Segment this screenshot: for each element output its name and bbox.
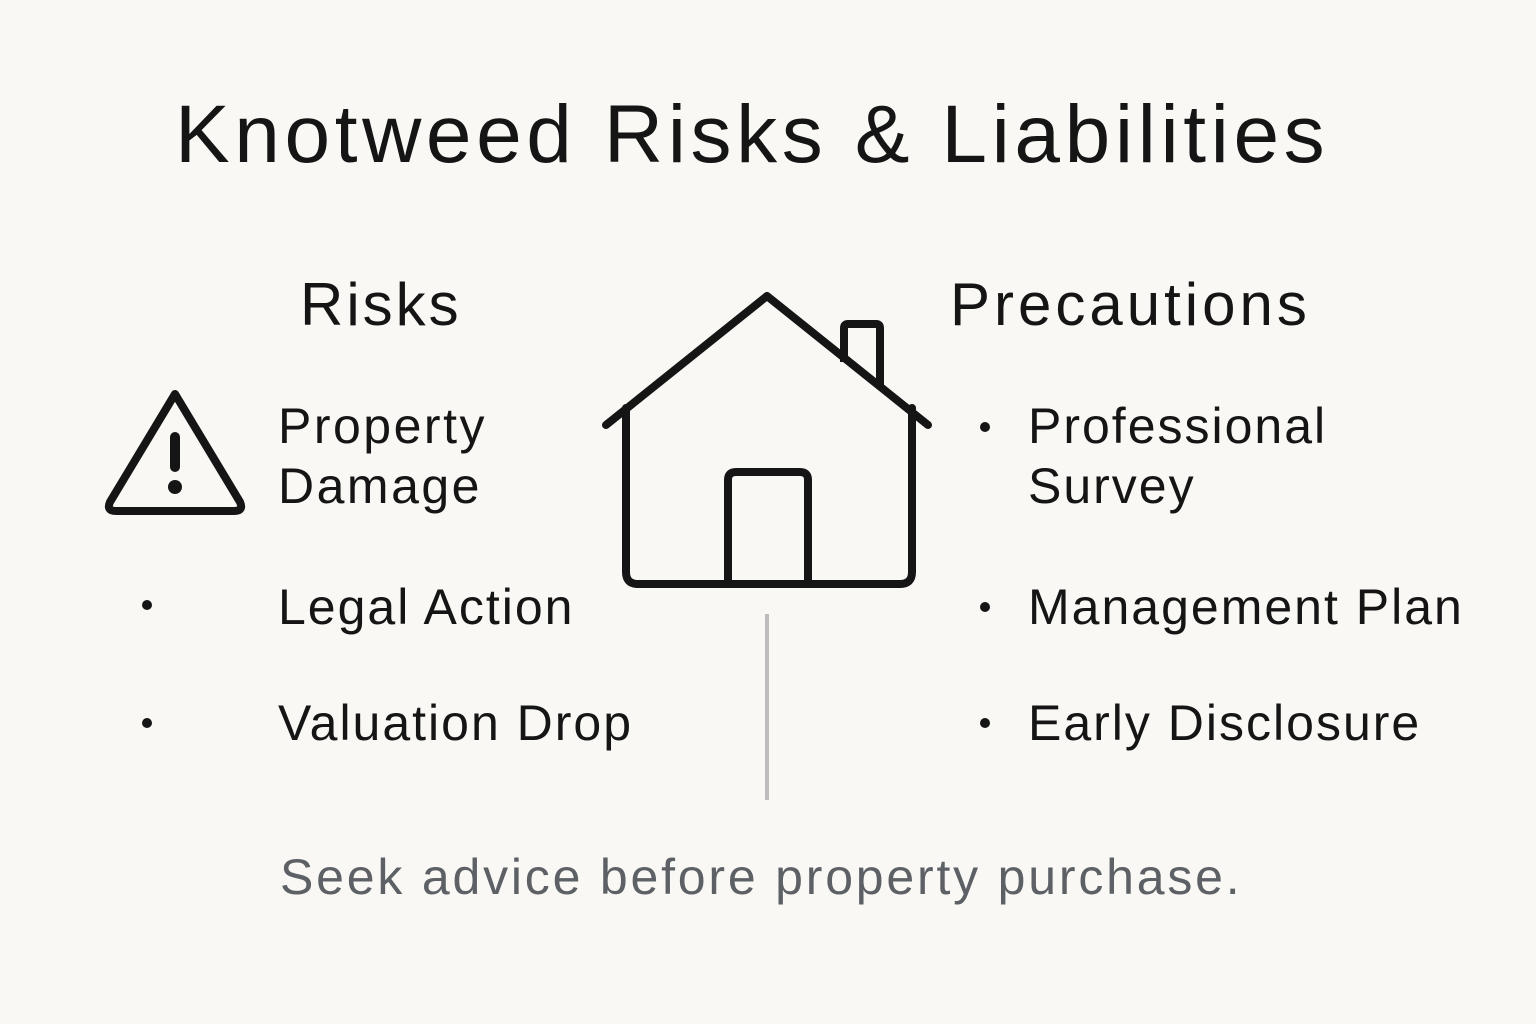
risk: valuation drop: Valuation Drop [278,695,633,751]
risk: legal action: Legal Action [278,579,574,635]
risk: legal action [142,579,574,635]
risk: property damage [278,398,487,514]
precaution: professional survey: Survey [1028,458,1196,514]
footer note: Seek advice before property purchase. [280,849,1242,905]
precaution: early disclosure: Early Disclosure [1028,695,1421,751]
precaution: professional survey: Professional [1028,398,1327,454]
risk: property damage: Property [278,398,487,454]
icon: warning [104,390,246,515]
heading: precautions: Precautions [950,271,1311,338]
divider line [765,614,769,800]
precaution: management plan: Management Plan [1028,579,1464,635]
icon: house [602,292,932,588]
heading: risks: Risks [300,271,462,338]
title: Knotweed Risks & Liabilities [175,89,1329,180]
precaution: professional survey [980,398,1327,514]
risk: property damage: Damage [278,458,482,514]
